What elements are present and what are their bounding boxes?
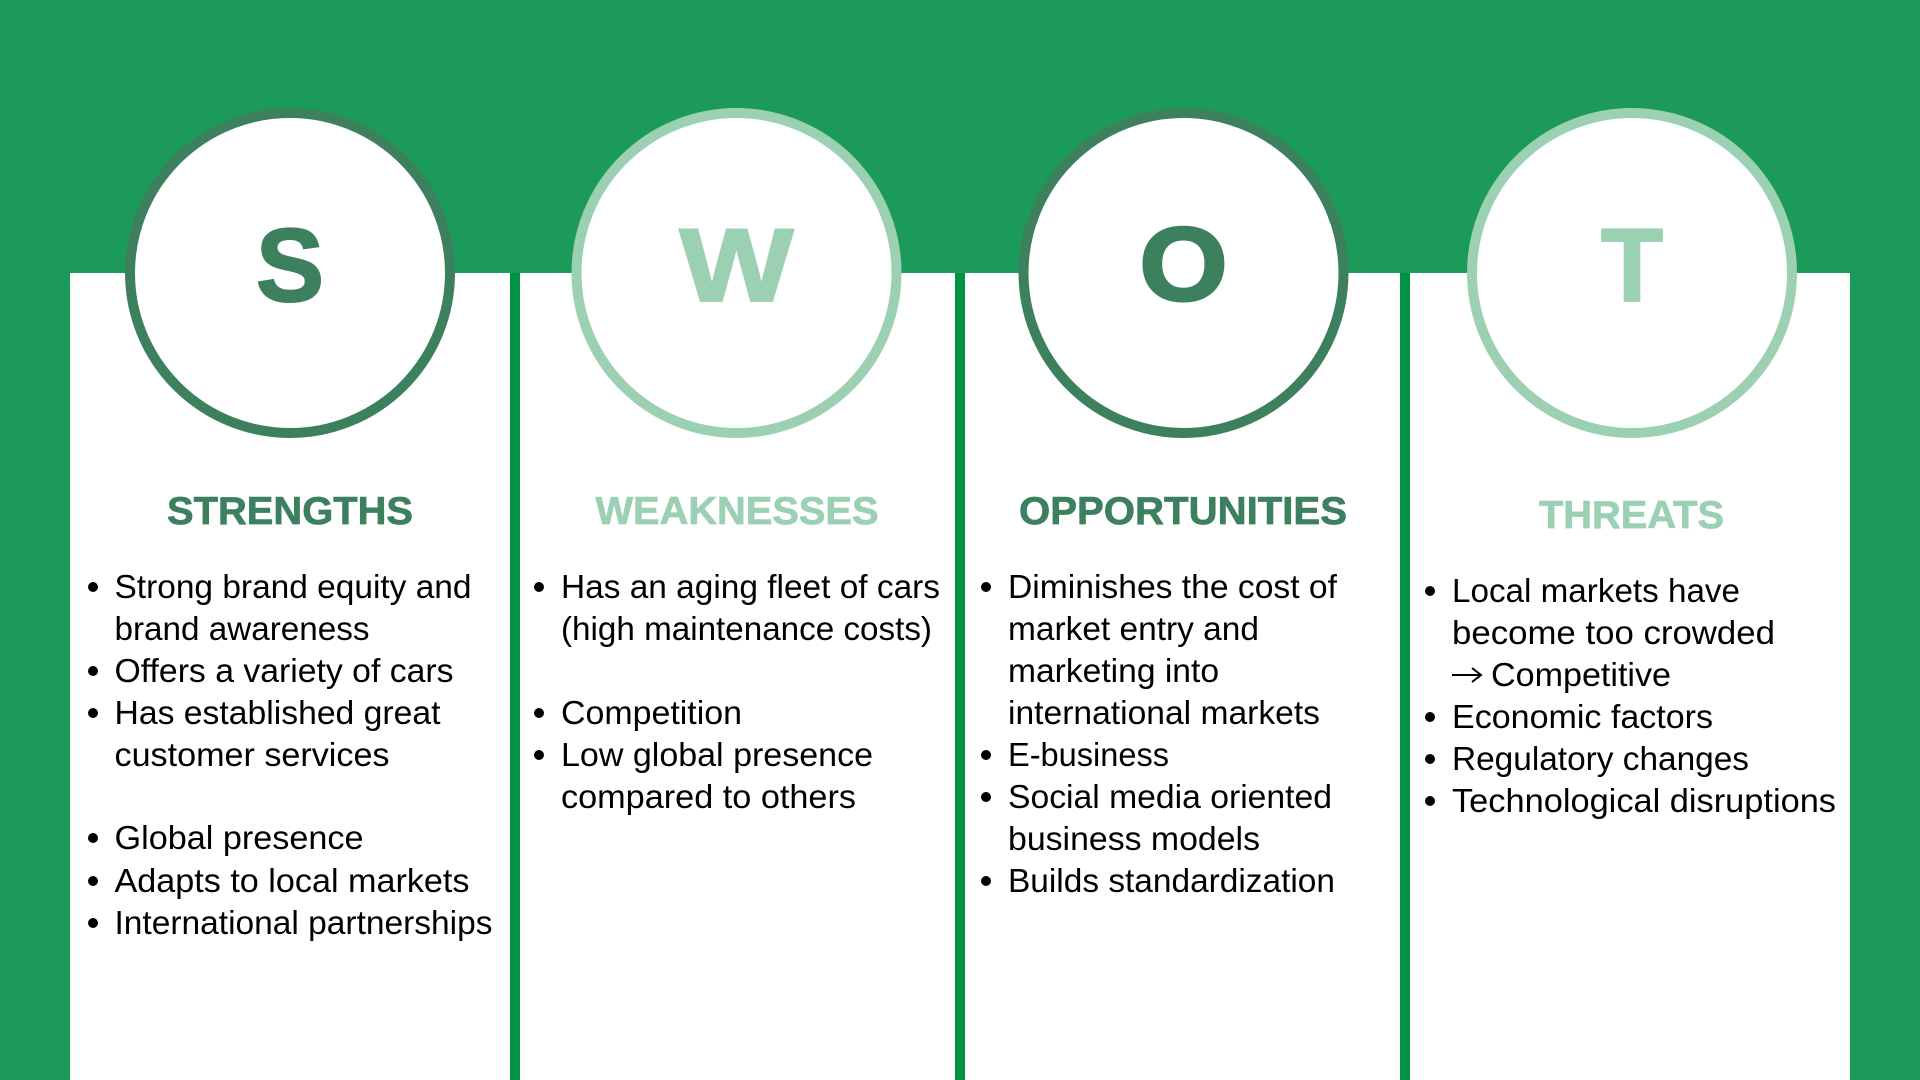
letter O: O (1140, 207, 1228, 323)
threats card (1410, 273, 1850, 1080)
opportunities list: E-business (1008, 736, 1169, 773)
strengths heading: STRENGTHS (167, 490, 413, 533)
panel: threats (1410, 113, 1850, 1080)
opportunities circle badge (1024, 113, 1344, 433)
panel: opportunities (965, 113, 1400, 1080)
weaknesses heading: WEAKNESSES (596, 490, 878, 533)
threats list (1425, 572, 1836, 819)
weaknesses list: Competition (561, 694, 742, 731)
strengths card (70, 273, 510, 1080)
strengths list: Global presence (114, 819, 364, 856)
weaknesses circle badge (576, 113, 896, 433)
icon: arrow (1452, 668, 1481, 682)
panel: weaknesses (520, 113, 955, 1080)
weaknesses list: Has an aging fleet of cars (561, 568, 940, 605)
strengths list: Strong brand equity and (114, 568, 472, 605)
opportunities list: market entry and (1008, 610, 1259, 647)
opportunities list: Diminishes the cost of (1008, 568, 1338, 605)
threats list: become too crowded (1452, 614, 1775, 651)
opportunities list: international markets (1008, 694, 1320, 731)
weaknesses list: compared to others (561, 778, 856, 815)
strengths list: Offers a variety of cars (114, 652, 454, 689)
column dividers (510, 273, 1850, 1080)
weaknesses list: Low global presence (561, 736, 873, 773)
threats list: Local markets have (1452, 572, 1740, 609)
panel: strengths (70, 113, 510, 1080)
strengths list: Has established great (114, 694, 440, 731)
opportunities card (965, 273, 1400, 1080)
strengths circle badge (130, 113, 450, 433)
threats heading: THREATS (1539, 494, 1724, 537)
threats list: Competitive (1491, 656, 1671, 693)
opportunities list (981, 568, 1338, 899)
opportunities heading: OPPORTUNITIES (1019, 490, 1347, 533)
strengths list: customer services (114, 736, 390, 773)
opportunities list: Social media oriented (1008, 778, 1332, 815)
opportunities list: business models (1008, 820, 1260, 857)
threats circle badge (1472, 113, 1792, 433)
letter W: W (680, 208, 794, 324)
threats list: Economic factors (1452, 698, 1713, 735)
strengths list: brand awareness (114, 610, 370, 647)
letter S: S (256, 208, 324, 324)
threats list: Technological disruptions (1452, 782, 1836, 819)
strengths list: Adapts to local markets (114, 862, 470, 899)
strengths list: International partnerships (114, 904, 493, 941)
weaknesses card (520, 273, 955, 1080)
opportunities list: Builds standardization (1008, 862, 1335, 899)
letter T: T (1601, 208, 1663, 324)
strengths list (88, 568, 493, 941)
opportunities list: marketing into (1008, 652, 1219, 689)
weaknesses list (534, 568, 940, 815)
weaknesses list: (high maintenance costs) (561, 610, 932, 647)
threats list: Regulatory changes (1452, 740, 1749, 777)
